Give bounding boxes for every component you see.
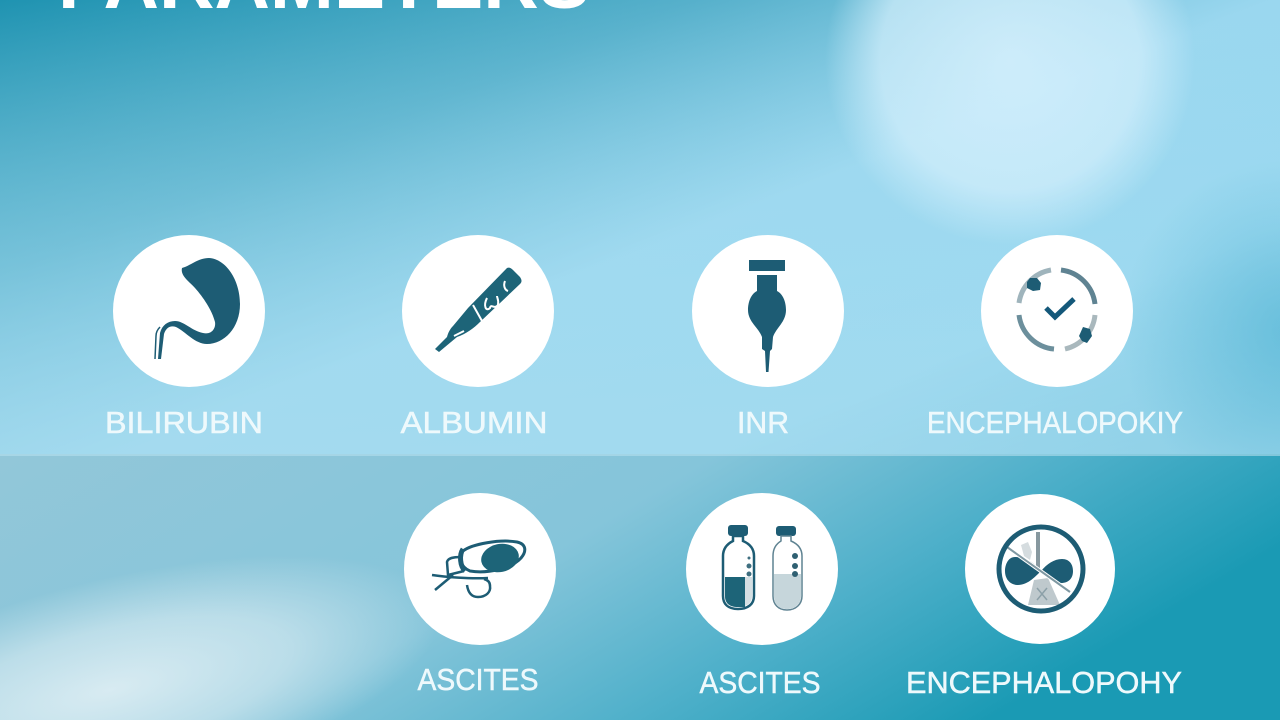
parameter: INR (692, 235, 844, 440)
label: ALBUMIN (400, 405, 548, 440)
background: lower panel (0, 454, 1280, 720)
label: BILIRUBIN (105, 405, 263, 440)
icon: organ with tubes (432, 540, 525, 597)
icon: bulb dropper (748, 260, 786, 372)
label: INR (737, 405, 789, 440)
icon: thermometer vial (435, 268, 522, 352)
parameter: ascites 1 (404, 493, 556, 697)
icon: vials (723, 525, 802, 610)
parameter: bilirubin (105, 235, 265, 440)
icon: stomach organ (155, 258, 240, 359)
parameter: albumin (400, 235, 554, 440)
background: upper panel (0, 0, 1280, 454)
label: ASCITES (700, 665, 820, 700)
parameter: ascites 2 (686, 493, 838, 700)
label: ENCEPHALOPOKIY (927, 405, 1183, 440)
label: ENCEPHALOPOHY (906, 665, 1182, 700)
icon: cycle check (1019, 270, 1095, 349)
parameter: encephalopathy bottom (906, 494, 1182, 700)
parameter: encephalopathy top (927, 235, 1183, 440)
icon: prohibited infinity (999, 527, 1083, 611)
label: ASCITES (418, 662, 538, 697)
